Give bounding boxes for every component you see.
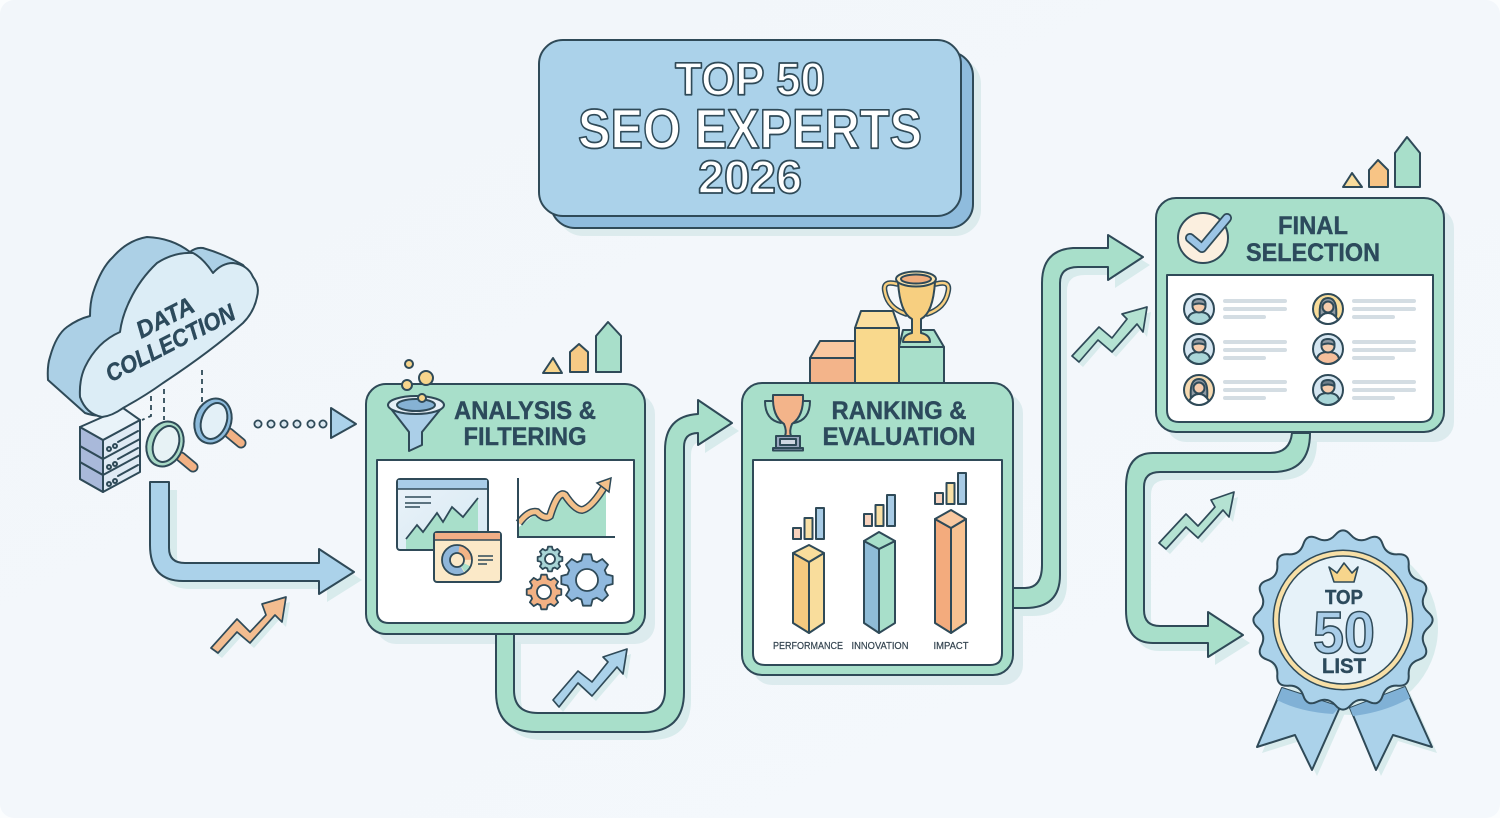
small rising shapes (1343, 137, 1420, 187)
bar labels: INNOVATION (852, 640, 908, 652)
trend arrow: green lower (1159, 492, 1238, 554)
badge rosette (1253, 530, 1433, 710)
bar: innovation (864, 495, 895, 633)
heading (454, 397, 596, 451)
heading: EVALUATION (822, 423, 976, 451)
icon: server stack (80, 408, 140, 492)
badge text: TOP (1325, 587, 1363, 609)
badge ribbons (1257, 687, 1437, 776)
heading: FILTERING (464, 423, 586, 451)
arrow: final selection to top 50 list (1126, 433, 1317, 665)
dotted arrow (254, 408, 356, 438)
chart window (397, 479, 488, 550)
cloud label: DATA (132, 292, 199, 344)
badge text (1313, 587, 1375, 678)
arrow: data collection to analysis (150, 482, 362, 602)
bar: impact (935, 473, 966, 633)
icon: green magnifier (140, 416, 193, 472)
line chart (518, 478, 615, 537)
expert list: placeholder text lines (1223, 299, 1416, 400)
icon: gears (527, 547, 613, 609)
icon: gold trophy (884, 272, 948, 342)
title text: 2026 (698, 151, 802, 203)
heading: ANALYSIS & (454, 397, 596, 425)
cloud label: COLLECTION (101, 299, 240, 388)
panel: final selection (1156, 137, 1454, 442)
title text: SEO EXPERTS (578, 97, 922, 160)
bar: performance (793, 508, 824, 633)
title banner (539, 40, 981, 236)
icon: check mark (1178, 213, 1228, 263)
arrow: analysis to ranking (496, 400, 739, 740)
title text: TOP 50 (675, 53, 825, 105)
icon: data collection cloud (48, 237, 258, 417)
icon: blue magnifier (188, 393, 241, 449)
badge text: 50 (1313, 600, 1375, 666)
icon: small trophy (765, 395, 810, 450)
expert list: avatars (1184, 294, 1343, 405)
pie chart window (434, 532, 501, 582)
badge text: LIST (1322, 655, 1366, 678)
trend arrow: green upper (1072, 307, 1151, 367)
badge: top 50 list (1253, 530, 1438, 776)
arrow: ranking to final selection (1013, 235, 1150, 616)
icon: funnel (388, 360, 444, 451)
small rising shapes (543, 322, 621, 373)
heading: FINAL (1278, 212, 1348, 240)
heading: SELECTION (1246, 239, 1380, 267)
heading (822, 397, 976, 451)
dashed connectors (142, 370, 202, 420)
badge crown (1329, 563, 1358, 582)
heading (1246, 212, 1380, 267)
trend arrow: blue (553, 649, 631, 712)
icon: podium and trophy (810, 272, 948, 385)
title text (578, 53, 922, 203)
bar labels (773, 640, 969, 652)
trend arrow: orange (211, 597, 290, 658)
panel: analysis and filtering (366, 322, 655, 644)
bar labels: IMPACT (934, 640, 969, 652)
panel: ranking and evaluation (742, 383, 1023, 685)
heading: RANKING & (832, 397, 966, 425)
bar labels: PERFORMANCE (773, 640, 843, 652)
